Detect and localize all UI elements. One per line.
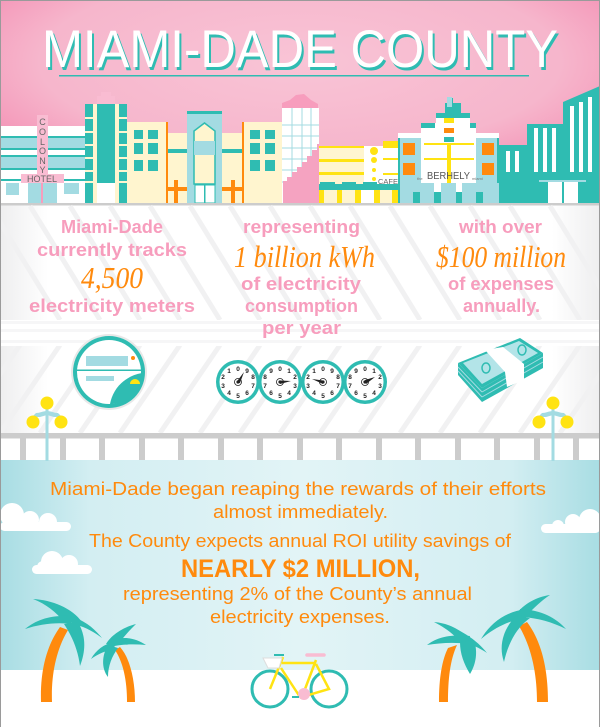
dial 2: 7 — [263, 383, 267, 390]
icon: electricity meter — [71, 334, 147, 410]
text: rewards message: The County expects annual ROI utility savings of — [89, 531, 512, 551]
text: expenses stat: of expenses — [448, 274, 554, 294]
dial 1 — [216, 360, 260, 404]
dial 3: 7 — [336, 383, 340, 390]
dial 1: 0 — [236, 366, 240, 373]
building: teal tower — [85, 92, 127, 203]
text: consumption stat: representing — [243, 217, 360, 237]
text: expenses stat — [436, 217, 566, 316]
dial 3: 0 — [321, 366, 325, 373]
building: cafe: CAFE — [378, 177, 398, 186]
dial 4: 3 — [378, 383, 382, 390]
dial 1: 7 — [251, 383, 255, 390]
text: meters stat: Miami-Dade — [61, 217, 163, 237]
dial 3: 1 — [312, 368, 316, 375]
building: Berkely Hotel — [398, 97, 499, 203]
beach — [0, 670, 600, 727]
dial 1: 6 — [245, 390, 249, 397]
building: Berkely Hotel: the — [417, 176, 423, 181]
icon: left palm trees — [25, 599, 146, 702]
panel: statistics background — [0, 203, 600, 438]
building: teal towers right — [497, 86, 600, 203]
dial 2: 3 — [293, 383, 297, 390]
text: rewards message — [50, 479, 546, 627]
building: cream block with central blue tower — [127, 111, 282, 203]
building: Colony Hotel: O — [39, 127, 46, 137]
text: rewards message: representing 2% of the County’s annual — [123, 584, 472, 604]
dial 1: 2 — [221, 374, 225, 381]
text: consumption stat — [234, 217, 375, 338]
text: consumption stat: per year — [262, 318, 341, 338]
dial 4: 6 — [354, 390, 358, 397]
dial 2: 8 — [263, 374, 267, 381]
dial 3 — [301, 360, 345, 404]
fence — [0, 433, 600, 460]
text: meters stat — [29, 217, 195, 316]
dial 2: 0 — [278, 366, 282, 373]
dial 4: 5 — [363, 393, 367, 400]
lamp post right — [532, 396, 574, 461]
text: consumption stat: consumption — [245, 296, 358, 316]
text: meters stat: 4,500 — [81, 260, 143, 295]
text: meters stat: electricity meters — [29, 296, 195, 316]
text: consumption stat: 1 billion kWh — [234, 239, 375, 274]
cloud right — [541, 509, 600, 533]
building: Berkely Hotel: BERHELY — [427, 171, 470, 182]
building: Colony Hotel: C — [39, 117, 46, 127]
dial 2: 4 — [287, 390, 291, 397]
building: Colony Hotel: L — [40, 137, 45, 147]
header sky background — [0, 0, 600, 206]
dial 4: 9 — [354, 368, 358, 375]
text: rewards message: NEARLY $2 MILLION, — [181, 555, 420, 583]
text: meters stat: currently tracks — [37, 240, 187, 260]
building: cafe — [319, 141, 399, 203]
building: Colony Hotel: Y — [39, 165, 46, 175]
dial 4: 2 — [378, 374, 382, 381]
dial 4: 8 — [348, 374, 352, 381]
text: rewards message: almost immediately. — [213, 502, 388, 522]
icon: right palm trees — [427, 595, 566, 702]
text: expenses stat: annually. — [463, 296, 540, 316]
building: Colony Hotel: HOTEL — [27, 174, 57, 184]
dial 1: 8 — [251, 374, 255, 381]
icon: bicycle — [252, 655, 347, 707]
dial 4: 7 — [348, 383, 352, 390]
dial 3: 3 — [306, 383, 310, 390]
panel: sky — [0, 460, 600, 670]
dial 2: 1 — [287, 368, 291, 375]
building: Colony Hotel: O — [39, 146, 46, 156]
dial 3: 9 — [330, 368, 334, 375]
cloud left lower — [32, 551, 92, 574]
text: rewards message: electricity expenses. — [210, 607, 390, 627]
dial 3: 8 — [336, 374, 340, 381]
dial 3: 4 — [312, 390, 316, 397]
clouds — [0, 503, 600, 574]
icon: stack of money — [458, 338, 543, 402]
dial 3: 5 — [321, 393, 325, 400]
dial 2 — [258, 360, 302, 404]
text: rewards message: Miami-Dade began reaping the rewards of their efforts — [50, 479, 546, 499]
dial 1: 5 — [236, 393, 240, 400]
title: MIAMI-DADE COUNTY — [44, 23, 560, 82]
building: Colony Hotel: N — [39, 156, 46, 166]
dial 4: 0 — [363, 366, 367, 373]
dial 4: 1 — [372, 368, 376, 375]
lamp post left — [26, 396, 68, 461]
skyline — [0, 86, 600, 204]
dial 2: 9 — [269, 368, 273, 375]
cloud left top — [0, 503, 71, 531]
dial 1: 4 — [227, 390, 231, 397]
dial 2: 2 — [293, 374, 297, 381]
dial 1: 3 — [221, 383, 225, 390]
building: Berkely Hotel: miami — [472, 176, 483, 181]
dial 1: 1 — [227, 368, 231, 375]
dial 3: 2 — [306, 374, 310, 381]
dial 4 — [343, 360, 387, 404]
dial 2: 5 — [278, 393, 282, 400]
building: Colony Hotel — [0, 115, 85, 203]
text: expenses stat: with over — [458, 217, 542, 237]
icon: dial clocks — [216, 360, 387, 404]
title: MIAMI-DADE COUNTY — [42, 20, 558, 79]
text: expenses stat: $100 million — [436, 239, 566, 274]
dial 2: 6 — [269, 390, 273, 397]
dial 3: 6 — [330, 390, 334, 397]
building: grid tower with pink stairs — [282, 94, 319, 204]
dial 1: 9 — [245, 368, 249, 375]
text: consumption stat: of electricity — [241, 274, 361, 294]
dial 4: 4 — [372, 390, 376, 397]
